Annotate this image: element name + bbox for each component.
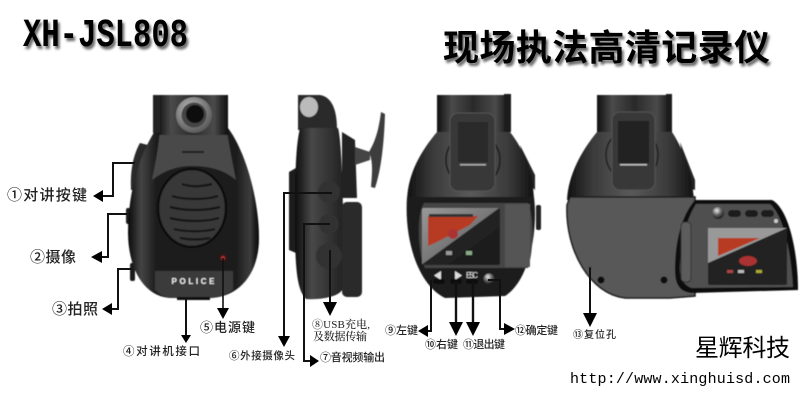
arrow 2 — [91, 214, 127, 263]
buttons — [433, 271, 494, 284]
arrow 9 — [418, 280, 431, 337]
screen — [422, 208, 500, 265]
flip screen — [675, 200, 798, 293]
device: back view — [407, 94, 541, 298]
arrow 6 — [278, 193, 332, 347]
device: side view — [289, 95, 385, 299]
label 13: ⑬复位孔 — [573, 328, 616, 341]
arrow 10 — [449, 280, 463, 336]
title: model number: XH-JSL808 — [23, 14, 188, 59]
label 8 — [312, 317, 370, 343]
device: front view — [126, 95, 259, 300]
flip screen display — [708, 228, 787, 285]
head — [157, 95, 228, 135]
control panel — [419, 203, 532, 268]
device: back view with open screen — [567, 94, 798, 298]
website url: http://www.xinghuisd.com — [570, 371, 790, 388]
label 12: ⑫确定键 — [515, 323, 558, 337]
arrow 1 — [93, 163, 135, 202]
label 1: ①对讲按键 — [7, 186, 87, 204]
lens — [176, 97, 212, 133]
side buttons — [131, 143, 148, 190]
label 4: ④对讲机接口 — [123, 344, 200, 358]
label 6: ⑥外接摄像头 — [229, 349, 295, 362]
flip screen buttons — [712, 207, 778, 223]
label 9: ⑨左键 — [385, 323, 418, 337]
arrow 7 — [304, 224, 330, 367]
label 11: ⑪退出键 — [463, 337, 505, 351]
buttons: ESC — [466, 271, 478, 280]
arrow 8 — [323, 250, 337, 316]
arrow 4 — [181, 298, 191, 343]
label 10: ⑩右键 — [425, 337, 458, 351]
face plate — [152, 125, 236, 180]
police logo: POLICE — [172, 277, 215, 286]
ring and clip — [446, 133, 500, 187]
arrow 13 — [583, 268, 597, 327]
band — [155, 271, 233, 298]
speaker — [158, 169, 226, 247]
arrow 3 — [102, 269, 132, 315]
label 8: 及数据传输 — [313, 329, 367, 343]
company name: 星辉科技 — [695, 335, 790, 362]
label 3: ③拍照 — [52, 301, 98, 318]
led — [219, 254, 227, 262]
belt clip — [369, 112, 385, 188]
arrow 12 — [488, 280, 515, 335]
arrow 5 — [217, 258, 229, 319]
arrow 11 — [466, 280, 480, 336]
label 5: ⑤电源键 — [200, 320, 255, 335]
label 2: ②摄像 — [30, 249, 76, 266]
label 7: ⑦音视频输出 — [320, 350, 385, 364]
label 8: ⑧USB充电, — [312, 317, 370, 331]
ports — [318, 181, 340, 203]
title: product name: 现场执法高清记录仪 — [443, 27, 770, 68]
body — [128, 128, 259, 298]
